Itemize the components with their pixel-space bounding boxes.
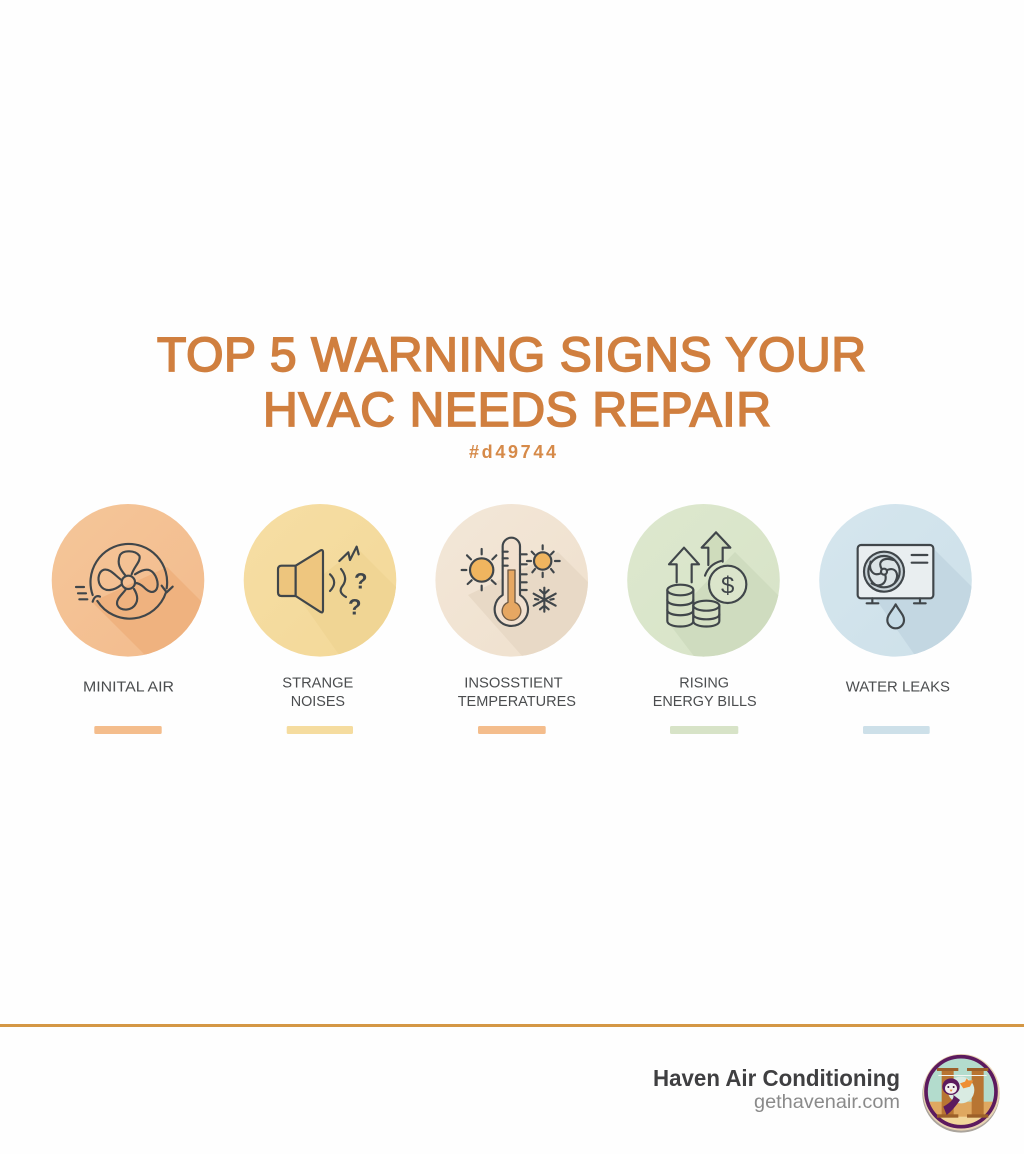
title: HVAC NEEDS REPAIR (263, 384, 771, 437)
accent bar (670, 726, 738, 734)
label: minital air: MINITAL AIR (83, 678, 174, 696)
title (157, 329, 866, 437)
subtitle colour code: #d49744 (469, 442, 556, 462)
icon: coins, arrows and dollar (667, 532, 746, 626)
label: strange noises: NOISES (291, 693, 345, 710)
icon: fan (76, 544, 173, 619)
label: rising energy bills: ENERGY BILLS (653, 693, 757, 710)
label: insosstient temperatures: INSOSSTIENT (464, 674, 563, 691)
accent bar (478, 726, 546, 734)
label: insosstient temperatures (458, 674, 576, 710)
footer website: gethavenair.com (754, 1091, 900, 1113)
icon: speaker with noises: ? (354, 569, 367, 594)
icon: AC unit with water drop (858, 545, 933, 628)
title: TOP 5 WARNING SIGNS YOUR (157, 329, 866, 382)
panel: minimal air (52, 504, 204, 734)
circle badge: speaker (244, 504, 396, 657)
panel: inconsistent temperatures (435, 504, 588, 734)
footer brand name: Haven Air Conditioning (653, 1065, 900, 1091)
circle badge: thermometer (435, 504, 588, 657)
circle badge: outdoor unit (819, 504, 972, 657)
accent bar (863, 726, 930, 734)
label: strange noises: STRANGE (282, 674, 353, 691)
label: water leaks: WATER LEAKS (846, 679, 950, 696)
icon: thermometer, suns and snowflake (462, 538, 560, 626)
panel: strange noises (244, 504, 396, 734)
accent bar (94, 726, 162, 734)
label: insosstient temperatures: TEMPERATURES (458, 693, 576, 710)
logo: penguin on H badge (922, 1054, 1000, 1133)
circle badge: energy bills (627, 504, 780, 657)
infographic canvas (0, 336, 1024, 1133)
icon: coins, arrows and dollar: $ (721, 572, 734, 599)
accent bar (287, 726, 353, 734)
panel: rising energy bills (627, 504, 780, 734)
label: rising energy bills (653, 674, 757, 710)
footer rule (0, 1024, 1024, 1027)
icon: speaker with noises (278, 547, 367, 619)
label: rising energy bills: RISING (679, 674, 729, 691)
panel: water leaks (819, 504, 972, 734)
label: strange noises (282, 674, 353, 710)
circle badge: fan (52, 504, 204, 657)
icon: speaker with noises: ? (348, 594, 361, 619)
